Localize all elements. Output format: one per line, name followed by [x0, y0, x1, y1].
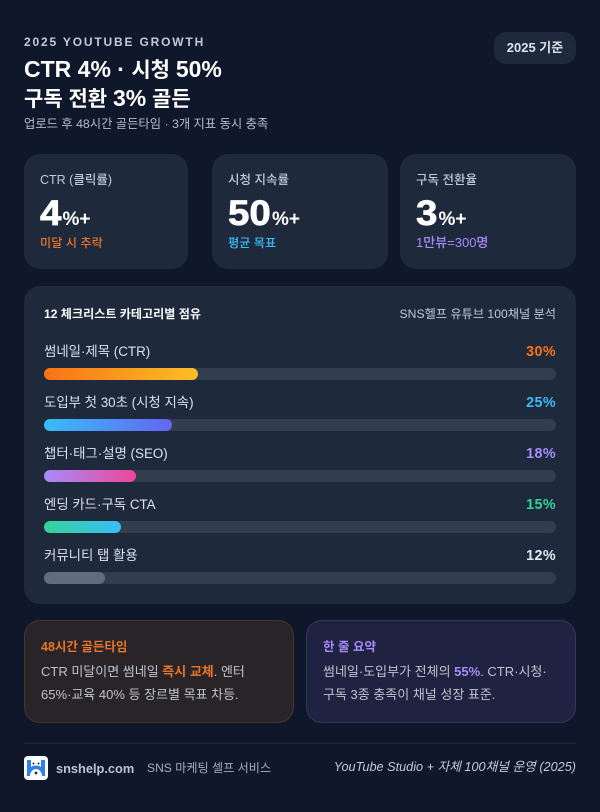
- bar: ending card: 15%: [526, 497, 556, 513]
- subscribe value: %+: [438, 209, 466, 230]
- summary body: 구독 3종 충족이 채널 성장 표준.: [323, 687, 495, 702]
- eyebrow: 2025 YOUTUBE GROWTH: [24, 35, 205, 49]
- bar: ending card: [44, 497, 556, 533]
- panel: retention card: [212, 154, 388, 269]
- subscribe label: 구독 전환율: [416, 173, 477, 187]
- badge: 2025 기준: 2025 기준: [507, 40, 563, 55]
- callout: 48 hour golden time: [24, 620, 294, 723]
- brand name: snshelp.com: [56, 761, 134, 776]
- retention value: [228, 194, 300, 233]
- bar: SEO: 18%: [526, 446, 556, 462]
- callout: one line summary: [306, 620, 576, 723]
- panel: CTR card: [24, 154, 188, 269]
- callout body: [41, 664, 245, 702]
- bar: community: 커뮤니티 탭 활용: [44, 548, 138, 563]
- chart source: SNS헬프 유튜브 100채널 분석: [400, 307, 556, 321]
- CTR value: 4: [40, 194, 61, 233]
- panel: category share chart: [24, 286, 576, 604]
- panel: subscribe card: [400, 154, 576, 269]
- CTR value: [40, 194, 90, 233]
- bar: thumbnail: [44, 344, 556, 380]
- chart heading: 12 체크리스트 카테고리별 점유: [44, 307, 201, 321]
- bar: intro: 도입부 첫 30초 (시청 지속): [44, 395, 194, 410]
- retention label: 시청 지속률: [228, 173, 289, 187]
- CTR value: %+: [62, 209, 90, 230]
- subtitle: 업로드 후 48시간 골든타임 · 3개 지표 동시 충족: [24, 117, 268, 131]
- callout heading: 48시간 골든타임: [41, 640, 127, 654]
- title: 구독 전환 3% 골든: [24, 84, 191, 110]
- title: CTR 4% · 시청 50%: [24, 56, 222, 82]
- summary heading: 한 줄 요약: [323, 640, 376, 654]
- CTR note: 미달 시 추락: [40, 236, 103, 250]
- bar: intro: 25%: [526, 395, 556, 411]
- brand tagline: SNS 마케팅 셀프 서비스: [147, 761, 271, 775]
- badge: 2025 기준: [494, 32, 576, 64]
- bar: ending card: 엔딩 카드·구독 CTA: [44, 497, 156, 512]
- subscribe value: [416, 194, 466, 233]
- callout body: 65%·교육 40% 등 장르별 목표 차등.: [41, 687, 239, 702]
- bar: SEO: 챕터·태그·설명 (SEO): [44, 446, 168, 461]
- summary body: 썸네일·도입부가 전체의 55%. CTR·시청·: [323, 664, 547, 679]
- subscribe note: 1만뷰=300명: [416, 235, 488, 250]
- source note: YouTube Studio + 자체 100채널 운영 (2025): [334, 760, 576, 774]
- bar: intro: [44, 395, 556, 431]
- bar: community: 12%: [526, 548, 556, 564]
- callout body: CTR 미달이면 썸네일 즉시 교체. 엔터: [41, 664, 245, 679]
- bar: thumbnail: 30%: [526, 344, 556, 360]
- summary body: [323, 664, 547, 702]
- title: [24, 56, 222, 110]
- CTR label: CTR (클릭률): [40, 173, 112, 187]
- bar: thumbnail: 썸네일·제목 (CTR): [44, 344, 150, 359]
- bar: community: [44, 548, 556, 584]
- retention value: %+: [272, 209, 300, 230]
- retention note: 평균 목표: [228, 236, 276, 250]
- subscribe value: 3: [416, 194, 437, 233]
- retention value: 50: [228, 194, 271, 233]
- icon: snshelp logo: [24, 756, 48, 780]
- bar: SEO: [44, 446, 556, 482]
